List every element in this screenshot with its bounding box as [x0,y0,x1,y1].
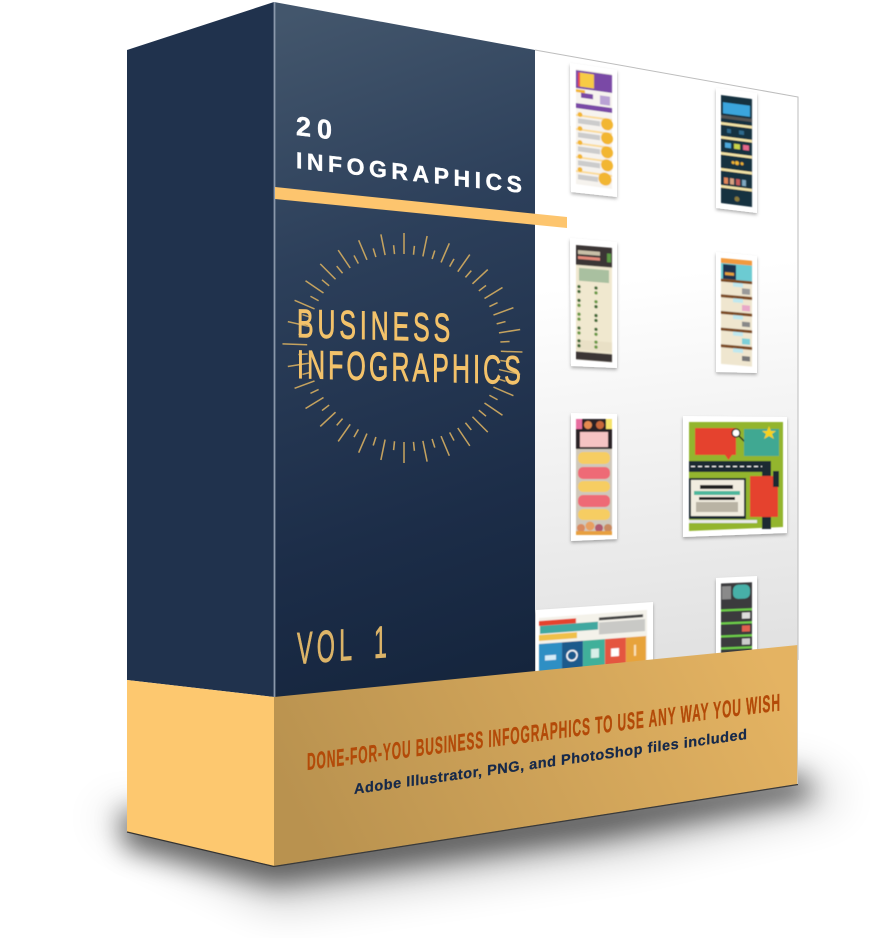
sunburst [282,229,522,467]
text: INFOGRAPHICS title: INFOGRAPHICS [297,343,521,394]
box front navy panel [274,2,535,699]
box left side panel [127,2,274,866]
thumbnail: dark green list infographic [716,576,757,665]
text: VOL 1: VOL 1 [297,617,391,674]
thumbnail: customer service infographic [571,413,617,541]
text: 20: 20 [296,110,332,145]
thumbnail: storefront infographic [716,252,757,373]
text: BUSINESS: BUSINESS [297,302,450,351]
thumbnail: dark teal infographic [716,88,757,213]
box front white panel [535,50,798,690]
text: INFOGRAPHICS: INFOGRAPHICS [296,147,522,198]
ground shadow [95,770,845,905]
thumbnail: purple and yellow infographic [570,63,617,197]
left side bottom edge [127,832,274,866]
accent bar [275,187,567,228]
thumbnail: SEO traffic infographic [683,416,787,537]
box front gold band [274,645,798,866]
text: band headline: DONE-FOR-YOU BUSINESS INFOGRAPHICS TO USE ANY WAY YOU WISH [307,690,780,776]
text: band subtitle: Adobe Illustrator, PNG, and PhotoShop files included [354,727,747,798]
thumbnail: power words infographic [570,238,617,368]
left side gold band [127,680,274,866]
thumbnail: unique selling proposition infographic [536,602,653,690]
